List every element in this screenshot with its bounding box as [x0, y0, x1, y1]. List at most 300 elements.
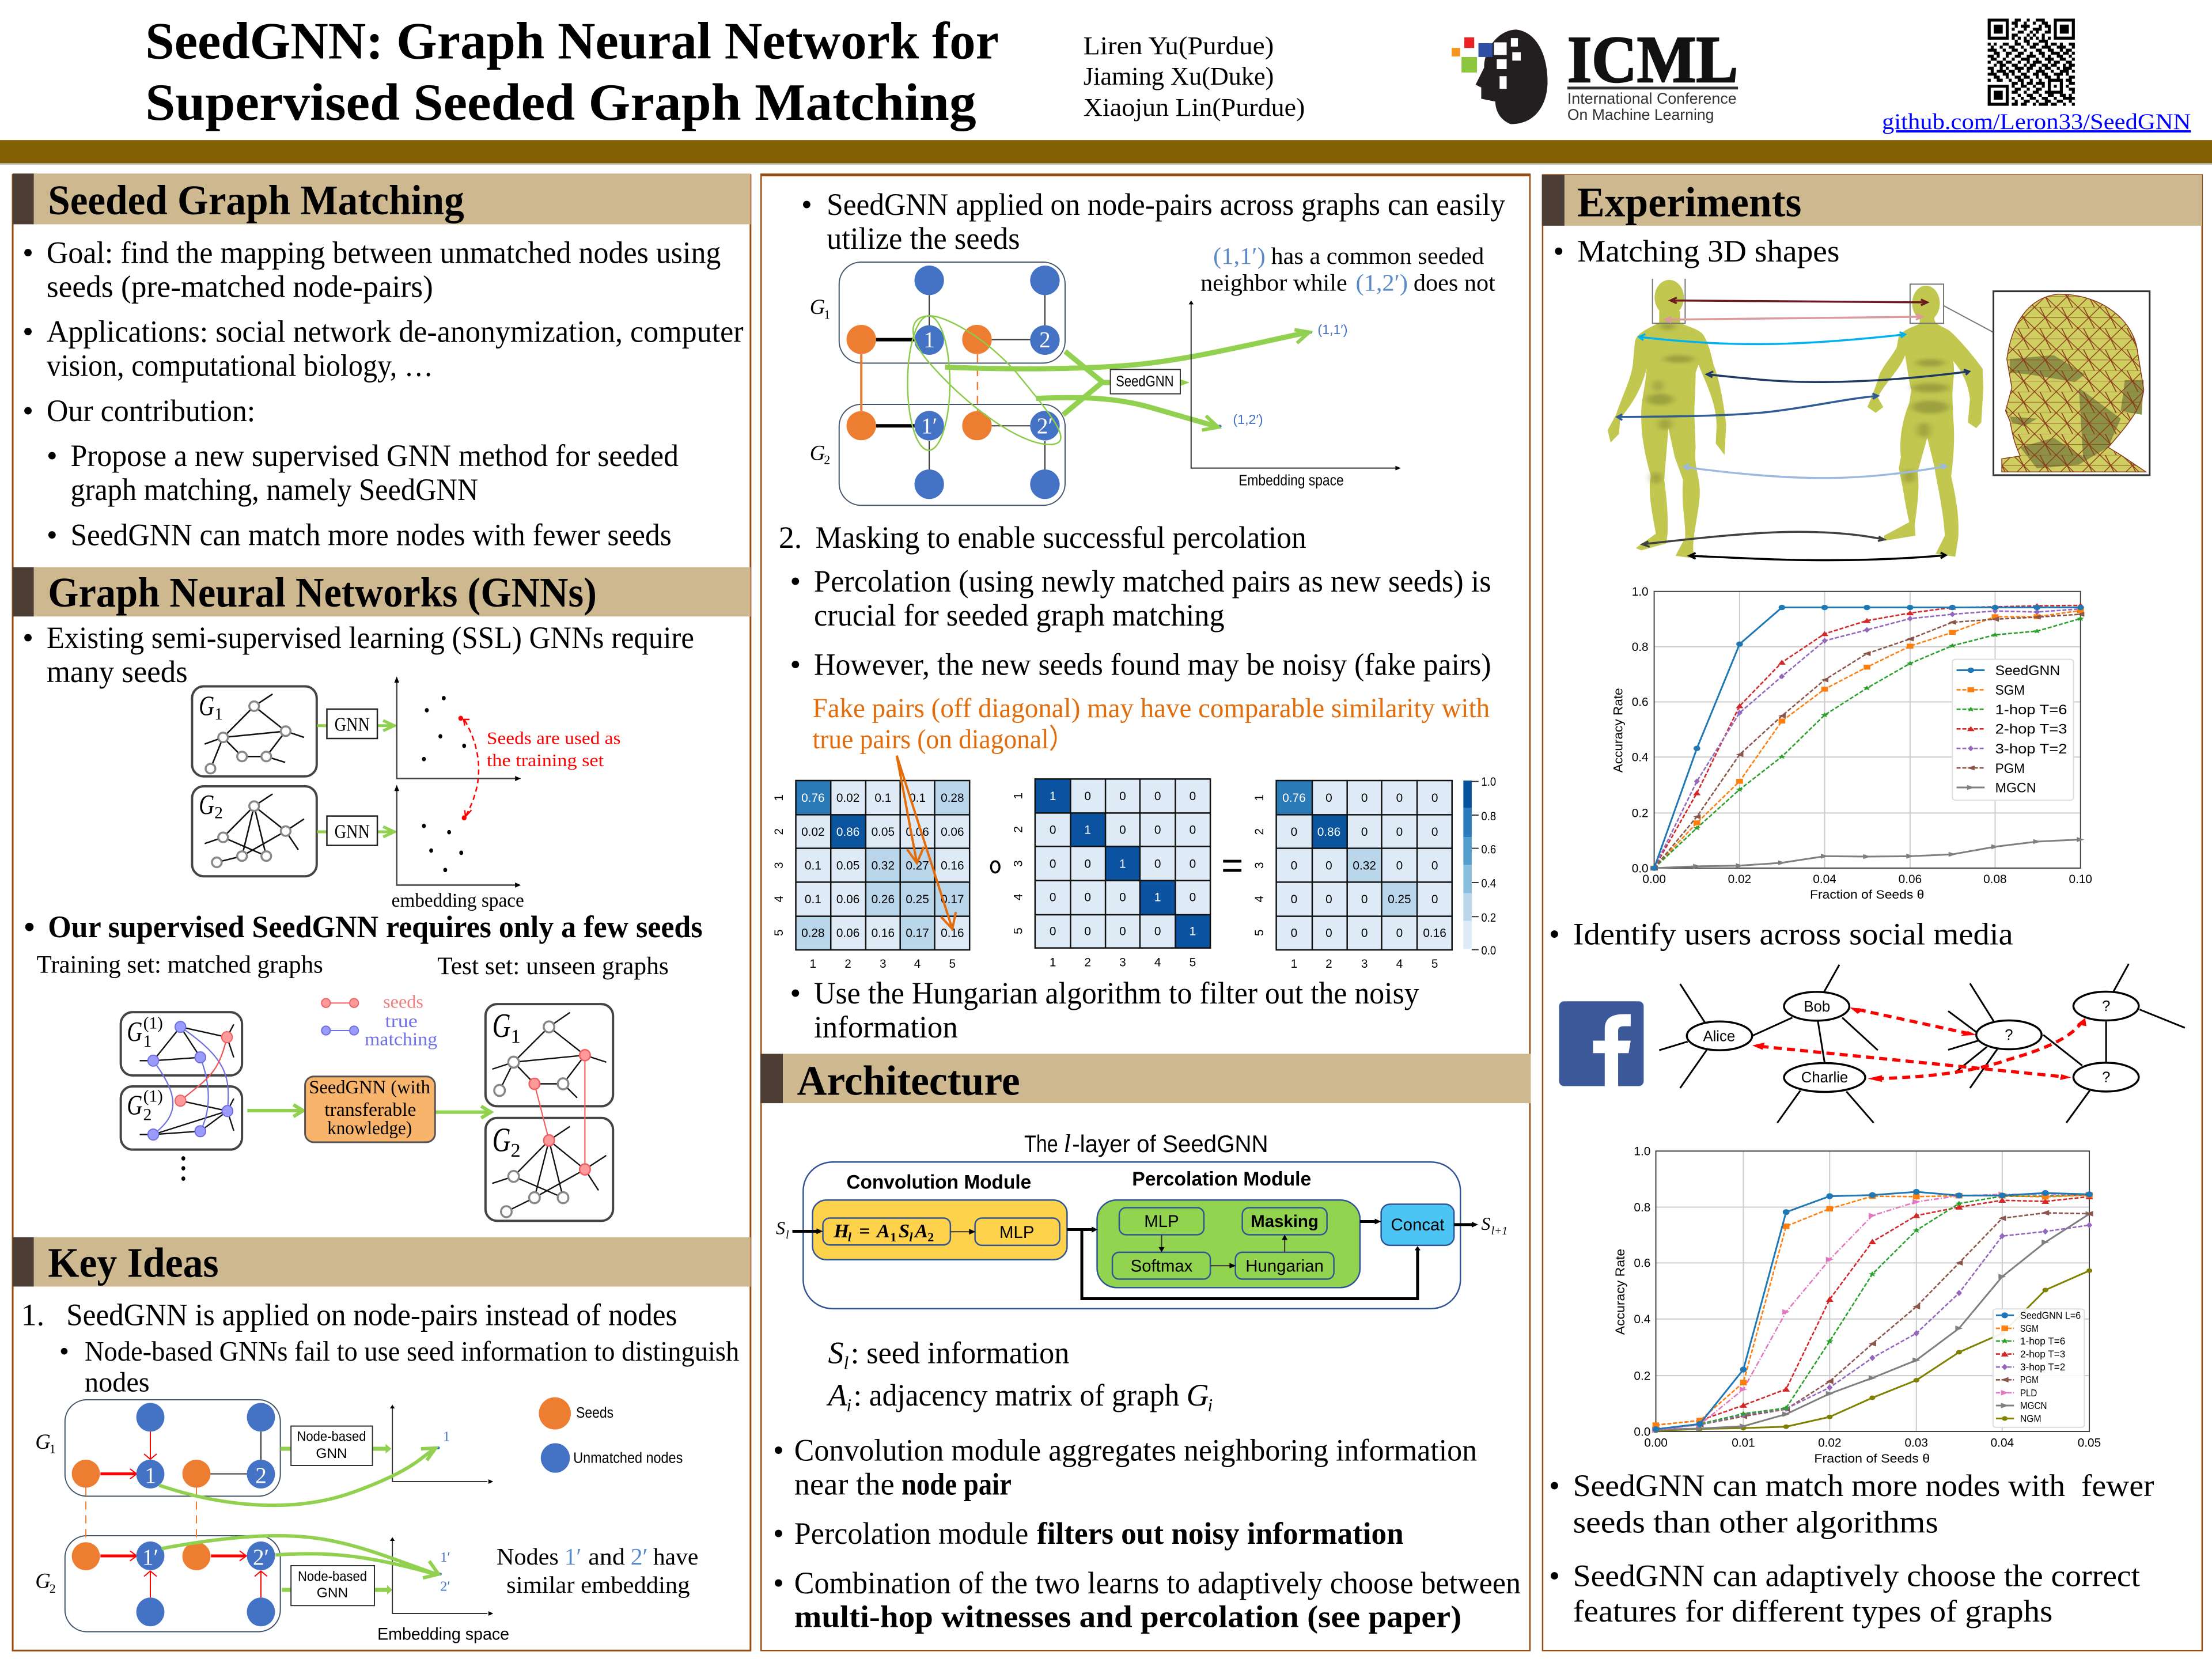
heatmaps: similarity, mask and result: 0 — [1154, 823, 1161, 836]
heatmaps: similarity, mask and result: 4 — [1154, 956, 1161, 969]
heatmaps: similarity, mask and result: 0 — [1431, 825, 1438, 839]
diagram: SeedGNN node-pair embedding: 1′ — [921, 414, 937, 438]
text block: goal and contribution: Our contribution: — [47, 393, 255, 428]
arrows: correspondences — [1618, 298, 1969, 560]
diagram: SeedGNN train and test: 2 — [511, 1139, 521, 1161]
heatmaps: similarity, mask and result: 0.16 — [1423, 927, 1446, 940]
heatmaps: similarity, mask and result: 0.28 — [941, 791, 964, 805]
heatmaps: similarity, mask and result: 0 — [1325, 893, 1332, 906]
text block: Hungarian: information — [814, 1010, 958, 1044]
heatmaps: similarity, mask and result: 0 — [1361, 927, 1368, 940]
chart: accuracy vs fraction of seeds (social media): PGM — [2020, 1374, 2039, 1385]
diagram: l-layer architecture: Percolation Module — [1132, 1168, 1311, 1190]
diagram: SeedGNN train and test: true — [385, 1011, 418, 1031]
text block: key idea 1 — [21, 1298, 739, 1398]
callout: fake pairs — [813, 693, 1490, 755]
diagram: semi-supervised GNN embedding: embedding space — [392, 889, 524, 911]
chart: accuracy vs fraction of seeds (social media): 0.8 — [1634, 1201, 1650, 1214]
text block: node-pairs: utilize the seeds — [827, 221, 1020, 256]
chart: accuracy vs fraction of seeds (3D shapes): 1-hop T=6 — [1995, 702, 2067, 718]
diagram: SeedGNN node-pair embedding: (1,1′) — [1213, 243, 1266, 270]
diagram: SeedGNN node-pair embedding: Embedding space — [1238, 472, 1344, 488]
heatmaps: similarity, mask and result: 4 — [772, 896, 786, 903]
heatmaps: similarity, mask and result: 0 — [1119, 823, 1126, 836]
diagram: l-layer architecture: l — [786, 1229, 789, 1241]
chart: accuracy vs fraction of seeds (3D shapes): 0.8 — [1632, 641, 1649, 654]
heatmaps: similarity, mask and result: 4 — [914, 957, 921, 971]
heatmaps: similarity, mask and result: 0 — [1396, 791, 1403, 805]
diagram: SeedGNN node-pair embedding — [810, 243, 1495, 505]
chart: accuracy vs fraction of seeds (social media): 0.05 — [2078, 1436, 2101, 1449]
heatmaps: similarity, mask and result: 3 — [880, 957, 887, 971]
chart: accuracy vs fraction of seeds (social media): 0.2 — [1634, 1370, 1650, 1383]
diagram: l-layer architecture: Concat — [1391, 1215, 1445, 1234]
text block: modules: • — [773, 1516, 784, 1551]
text block: key idea 1: 1. — [21, 1298, 44, 1332]
heatmaps: similarity, mask and result: 1 — [1291, 957, 1297, 971]
heatmaps: similarity, mask and result: 3 — [1012, 860, 1025, 867]
diagram: l-layer architecture: H — [833, 1220, 850, 1242]
chart: accuracy vs fraction of seeds (3D shapes): 0.04 — [1813, 873, 1836, 886]
chart: accuracy vs fraction of seeds (3D shapes): PGM — [1995, 761, 2025, 777]
text block: Hungarian — [790, 976, 1419, 1044]
diagram: node-based GNN embedding: 1′ — [142, 1545, 158, 1570]
diagram: node-based GNN embedding: similar embedding — [506, 1572, 690, 1599]
heading: Experiments — [1542, 175, 2202, 226]
diagram: SeedGNN node-pair embedding: does not — [1414, 270, 1495, 296]
heatmaps: similarity, mask and result: 0.06 — [906, 825, 929, 839]
text block: conclusions — [1549, 1468, 2154, 1628]
heading: Architecture: Architecture — [797, 1057, 1020, 1104]
diagram: social network de-anonymization: ? — [2102, 998, 2110, 1014]
heatmaps: similarity, mask and result: 0.0 — [1481, 944, 1496, 957]
chart: accuracy vs fraction of seeds (3D shapes): 0.6 — [1632, 696, 1649, 709]
text block: matching 3D shapes: Matching 3D shapes — [1577, 234, 1839, 268]
diagram: semi-supervised GNN embedding: G — [199, 789, 214, 820]
diagram: node-based GNN embedding: GNN — [316, 1446, 347, 1461]
text block: conclusions: seeds than other algorithms — [1573, 1505, 1938, 1540]
heatmaps: similarity, mask and result: 0.17 — [906, 927, 929, 940]
diagram: social network de-anonymization — [1559, 964, 2185, 1123]
diagram: SeedGNN train and test: (1) — [143, 1088, 163, 1106]
diagram: l-layer architecture: Softmax — [1131, 1256, 1193, 1275]
heatmaps: similarity, mask and result: 1 — [1084, 823, 1091, 836]
heatmaps: similarity, mask and result: 0 — [1325, 791, 1332, 805]
chart: accuracy vs fraction of seeds (3D shapes): 0.08 — [1983, 873, 2007, 886]
heatmaps: similarity, mask and result: 0.25 — [906, 893, 929, 906]
text block: modules: near the — [794, 1467, 895, 1501]
heatmaps: similarity, mask and result: 1 — [1190, 925, 1196, 938]
callout: fake pairs: true pairs (on diagonal） — [813, 724, 1075, 755]
text block: masking: However, the new seeds found may be noisy (fake pairs) — [814, 647, 1491, 682]
chart: accuracy vs fraction of seeds (social media): 0.02 — [1818, 1436, 1842, 1449]
diagram: l-layer architecture: A — [876, 1220, 890, 1242]
chart: accuracy vs fraction of seeds (social media): 2-hop T=3 — [2020, 1348, 2065, 1359]
diagram: social network de-anonymization: ? — [2005, 1027, 2013, 1043]
heatmaps: similarity, mask and result: 0 — [1190, 823, 1196, 836]
heatmaps: similarity, mask and result: 0 — [1084, 790, 1091, 803]
heatmaps: similarity, mask and result: 1 — [1012, 793, 1025, 800]
callout: fake pairs: Fake pairs (off diagonal) may have comparable similarity with — [813, 693, 1490, 724]
heatmaps: similarity, mask and result: 0 — [1050, 823, 1056, 836]
heading: Seeded Graph Matching: Seeded Graph Matching — [48, 177, 464, 224]
text block: masking — [779, 520, 1491, 682]
diagram: SeedGNN train and test: G — [127, 1089, 142, 1121]
heatmaps: similarity, mask and result: 0 — [1190, 858, 1196, 871]
diagram: node-based GNN embedding: 1 — [443, 1429, 450, 1445]
heatmaps: similarity, mask and result: 0.02 — [801, 825, 825, 839]
text block: SSL GNNs: Existing semi-supervised learning (SSL) GNNs require — [47, 620, 694, 655]
heatmaps: similarity, mask and result: 0 — [1119, 790, 1126, 803]
heatmaps: similarity, mask and result: 1 — [810, 957, 816, 971]
diagram: semi-supervised GNN embedding: G — [199, 690, 214, 722]
text block: supervised SeedGNN: Our supervised SeedGNN requires only a few seeds — [48, 910, 703, 944]
chart: accuracy vs fraction of seeds (social media): 3-hop T=2 — [2020, 1361, 2065, 1373]
header — [0, 12, 2212, 165]
heatmaps: similarity, mask and result: 2 — [1084, 956, 1091, 969]
heatmaps: similarity, mask and result: 0 — [1431, 893, 1438, 906]
diagram: node-based GNN embedding: Node-based — [297, 1429, 366, 1445]
diagram: social network de-anonymization: Charlie — [1801, 1070, 1848, 1086]
diagram: node-based GNN embedding: 1 — [50, 1441, 56, 1456]
chart: accuracy vs fraction of seeds (social media): 0.03 — [1904, 1436, 1928, 1449]
diagram: node-based GNN embedding: 1′ — [440, 1550, 450, 1565]
diagram: SeedGNN node-pair embedding: 2 — [824, 453, 830, 467]
diagram: l-layer architecture: A — [914, 1220, 928, 1242]
text block: supervised SeedGNN — [24, 910, 703, 980]
diagram: SeedGNN node-pair embedding: neighbor while — [1200, 270, 1347, 296]
chart: accuracy vs fraction of seeds (3D shapes): 0.4 — [1632, 751, 1649, 764]
heatmaps: similarity, mask and result: 0.32 — [872, 859, 895, 873]
diagram: social network de-anonymization: Alice — [1703, 1028, 1735, 1044]
heatmaps: similarity, mask and result: 0.1 — [874, 791, 891, 805]
heatmaps: similarity, mask and result: 0.86 — [836, 825, 859, 839]
link: github.com/Leron33/SeedGNN — [1882, 109, 2191, 134]
diagram: SeedGNN train and test: transferable — [324, 1100, 416, 1120]
text block: masking: Percolation (using newly matched pairs as new seeds) is — [814, 564, 1491, 599]
heatmaps: similarity, mask and result: 0.16 — [941, 927, 964, 940]
heatmaps: similarity, mask and result: 3 — [1253, 862, 1266, 869]
diagram: l-layer architecture: 2 — [927, 1230, 934, 1244]
diagram: l-layer architecture — [776, 1130, 1508, 1309]
heatmaps: similarity, mask and result: 0.1 — [805, 893, 821, 906]
heatmaps: similarity, mask and result: 0 — [1291, 927, 1297, 940]
chart: accuracy vs fraction of seeds (social media): 0.4 — [1634, 1313, 1650, 1326]
diagram: node-based GNN embedding: 1′ — [565, 1544, 582, 1570]
diagram: l-layer architecture: -layer of SeedGNN — [1072, 1130, 1268, 1157]
heatmaps: similarity, mask and result: 0 — [1431, 791, 1438, 805]
heading: Seeded Graph Matching — [13, 173, 751, 224]
diagram: l-layer architecture: Convolution Module — [846, 1171, 1031, 1193]
text block: modules: • — [773, 1566, 784, 1600]
text block: goal and contribution: Propose a new supervised GNN method for seeded — [70, 438, 679, 473]
chart: accuracy vs fraction of seeds (3D shapes): 1.0 — [1632, 585, 1649, 599]
text block: key idea 1: • — [59, 1335, 69, 1367]
heatmaps: similarity, mask and result: 0.6 — [1481, 843, 1496, 857]
chart: accuracy vs fraction of seeds (social media) — [1613, 1145, 2101, 1465]
heatmaps: similarity, mask and result: 0 — [1084, 925, 1091, 938]
diagram: SeedGNN train and test: G — [493, 1121, 511, 1158]
diagram: SeedGNN train and test: 2 — [143, 1105, 151, 1124]
authors: Jiaming Xu(Duke) — [1084, 62, 1274, 90]
diagram: SeedGNN train and test: matching — [365, 1029, 437, 1050]
chart: accuracy vs fraction of seeds (social media): 0.04 — [1991, 1436, 2014, 1449]
text block: key idea 1: Node-based GNNs fail to use seed information to distinguish — [85, 1335, 739, 1367]
diagram: semi-supervised GNN embedding: GNN — [335, 714, 370, 736]
text block: supervised SeedGNN: • — [24, 910, 35, 944]
diagram: SeedGNN node-pair embedding: has a common seeded — [1271, 243, 1484, 270]
heatmaps: similarity, mask and result: 0 — [1084, 891, 1091, 904]
text block: node-pairs — [801, 187, 1505, 256]
chart: accuracy vs fraction of seeds (social media): Fraction of Seeds θ — [1814, 1452, 1930, 1465]
diagram: l-layer architecture: l — [848, 1230, 852, 1244]
heatmaps: similarity, mask and result: 0 — [1050, 858, 1056, 871]
text block: modules: Convolution module aggregates neighboring information — [794, 1433, 1477, 1468]
text block: goal and contribution: Goal: find the mapping between unmatched nodes using — [47, 235, 721, 270]
heatmaps: similarity, mask and result: 0 — [1361, 791, 1368, 805]
heatmaps: similarity, mask and result: 0.06 — [941, 825, 964, 839]
diagram: SeedGNN node-pair embedding: G — [810, 295, 825, 319]
text block: SSL GNNs: many seeds — [47, 654, 188, 689]
heatmaps: similarity, mask and result: 0 — [1325, 859, 1332, 873]
text block: goal and contribution: • — [47, 517, 58, 552]
title: SeedGNN: Graph Neural Network for — [145, 12, 999, 70]
text block: goal and contribution: SeedGNN can match more nodes with fewer seeds — [70, 517, 672, 552]
diagram: l-layer architecture: Masking — [1251, 1212, 1319, 1231]
heatmaps: similarity, mask and result: 0 — [1190, 790, 1196, 803]
heatmaps: similarity, mask and result: 2 — [1325, 957, 1332, 971]
diagram: SeedGNN node-pair embedding: (1,2′) — [1355, 270, 1408, 296]
heatmaps: similarity, mask and result: 2 — [772, 828, 786, 835]
text block: masking: crucial for seeded graph matching — [814, 598, 1225, 632]
text block: notation: l — [843, 1353, 849, 1373]
heatmaps: similarity, mask and result: 0.76 — [1282, 791, 1306, 805]
heatmaps: similarity, mask and result: 0.06 — [836, 893, 859, 906]
heatmaps: similarity, mask and result: 0.06 — [836, 927, 859, 940]
text block: SSL GNNs: • — [22, 620, 33, 655]
heatmaps: similarity, mask and result: 0 — [1291, 893, 1297, 906]
chart: accuracy vs fraction of seeds (3D shapes): 2-hop T=3 — [1995, 722, 2067, 737]
chart: accuracy vs fraction of seeds (3D shapes): SGM — [1995, 683, 2025, 698]
heatmaps: similarity, mask and result: 5 — [1253, 929, 1266, 936]
heatmaps: similarity, mask and result: 0 — [1154, 925, 1161, 938]
heatmaps: similarity, mask and result: 0 — [1190, 891, 1196, 904]
heatmaps: similarity, mask and result: 0 — [1396, 927, 1403, 940]
header band — [0, 140, 2212, 165]
heading: Graph Neural Networks: Graph Neural Networks (GNNs) — [48, 569, 597, 616]
text block: key idea 1: SeedGNN is applied on node-pairs instead of nodes — [66, 1298, 677, 1332]
chart: accuracy vs fraction of seeds (social media): 1-hop T=6 — [2020, 1335, 2065, 1347]
heatmaps: similarity, mask and result: 0 — [1291, 859, 1297, 873]
heading: Architecture — [760, 1054, 1531, 1104]
diagram: l-layer architecture: l — [1064, 1130, 1071, 1158]
text block: modules: Percolation module — [794, 1516, 1028, 1551]
heading: Key Ideas: Key Ideas — [48, 1239, 219, 1286]
figure: 3D human shape correspondence — [1608, 279, 2150, 560]
text block: masking: • — [790, 647, 801, 682]
diagram: node-based GNN embedding: Seeds — [576, 1405, 613, 1421]
text block: goal and contribution: graph matching, namely SeedGNN — [70, 472, 478, 507]
text block: social media: • — [1549, 916, 1560, 951]
text block: goal and contribution: Applications: social network de-anonymization, computer — [47, 315, 744, 349]
diagram: semi-supervised GNN embedding: Seeds are used as — [487, 729, 621, 748]
diagram: l-layer architecture: MLP — [999, 1223, 1034, 1242]
heatmaps: similarity, mask and result: 0 — [1291, 825, 1297, 839]
heatmaps: similarity, mask and result: 0.1 — [909, 791, 926, 805]
diagram: node-based GNN embedding: G — [35, 1430, 51, 1453]
diagram: node-based GNN embedding: 2′ — [253, 1545, 269, 1570]
chart: accuracy vs fraction of seeds (social media): PLD — [2020, 1387, 2037, 1399]
text block: conclusions: features for different types of graphs — [1573, 1594, 2052, 1628]
text block: Hungarian: Use the Hungarian algorithm to filter out the noisy — [814, 976, 1419, 1010]
heatmaps: similarity, mask and result: 3 — [1119, 956, 1126, 969]
diagram: SeedGNN train and test — [121, 992, 613, 1221]
heatmaps: similarity, mask and result: 5 — [1431, 957, 1438, 971]
chart: accuracy vs fraction of seeds (3D shapes): Fraction of Seeds θ — [1810, 888, 1924, 902]
diagram: SeedGNN train and test: G — [127, 1016, 142, 1047]
diagram: node-based GNN embedding: 2′ — [631, 1544, 648, 1570]
heatmaps: similarity, mask and result: 0.16 — [872, 927, 895, 940]
heatmaps: similarity, mask and result: 0 — [1050, 891, 1056, 904]
chart: accuracy vs fraction of seeds (social media): 0.00 — [1644, 1436, 1668, 1449]
text block: SSL GNNs — [22, 620, 694, 689]
text block: notation: i — [846, 1395, 851, 1415]
heatmaps: similarity, mask and result: 1 — [1119, 858, 1126, 871]
icon: ICML logo: International Conference — [1567, 90, 1737, 107]
heatmaps: similarity, mask and result: 0 — [1396, 825, 1403, 839]
diagram: SeedGNN node-pair embedding: SeedGNN — [1116, 374, 1174, 390]
diagram: SeedGNN train and test: (1) — [143, 1014, 163, 1032]
icon: ICML logo: On Machine Learning — [1567, 106, 1714, 123]
heatmaps: similarity, mask and result: 1 — [1050, 790, 1056, 803]
diagram: node-based GNN embedding: Unmatched nodes — [573, 1450, 683, 1467]
heatmaps: similarity, mask and result: 0.4 — [1481, 877, 1496, 890]
heatmaps: similarity, mask and result: 0 — [1119, 891, 1126, 904]
chart: accuracy vs fraction of seeds (social media): MGCN — [2020, 1400, 2047, 1411]
heatmaps: similarity, mask and result: 0.1 — [805, 859, 821, 873]
chart: accuracy vs fraction of seeds (3D shapes) — [1611, 585, 2092, 902]
diagram: SeedGNN node-pair embedding: G — [810, 441, 825, 464]
heatmaps: similarity, mask and result — [772, 756, 1496, 971]
text block: conclusions: • — [1549, 1468, 1560, 1503]
diagram: node-based GNN embedding — [35, 1397, 698, 1644]
heatmaps: similarity, mask and result: 2 — [1253, 828, 1266, 835]
heatmaps: similarity, mask and result: 0.86 — [1317, 825, 1340, 839]
inset: head mesh — [1994, 291, 2150, 475]
chart: accuracy vs fraction of seeds (3D shapes): MGCN — [1995, 781, 2036, 796]
chart: accuracy vs fraction of seeds (social media): SGM — [2020, 1323, 2039, 1334]
diagram: node-based GNN embedding: have — [653, 1544, 698, 1570]
diagram: node-based GNN embedding: and — [588, 1544, 625, 1570]
chart: accuracy vs fraction of seeds (social media): 0.01 — [1732, 1436, 1755, 1449]
diagram: node-based GNN embedding: Nodes — [497, 1544, 559, 1570]
text block: goal and contribution: • — [47, 438, 58, 473]
text block: conclusions: SeedGNN can adaptively choose the correct — [1573, 1559, 2140, 1593]
chart: accuracy vs fraction of seeds (social media): 0.6 — [1634, 1257, 1650, 1270]
diagram: SeedGNN train and test: seeds — [383, 992, 423, 1012]
diagram: semi-supervised GNN embedding: GNN — [335, 821, 370, 843]
heatmaps: similarity, mask and result: 3 — [1361, 957, 1368, 971]
text block: goal and contribution: • — [22, 393, 33, 428]
heatmaps: similarity, mask and result: 0.28 — [801, 927, 825, 940]
heading: Experiments: Experiments — [1577, 179, 1801, 226]
heatmaps: similarity, mask and result: 0 — [1431, 859, 1438, 873]
diagram: node-based GNN embedding: 2 — [255, 1463, 267, 1488]
icon: QR code — [1988, 20, 2075, 104]
heatmaps: similarity, mask and result: 0.76 — [801, 791, 825, 805]
chart: accuracy vs fraction of seeds (social media): SeedGNN L=6 — [2020, 1309, 2081, 1321]
heatmaps: similarity, mask and result: 1 — [1154, 891, 1161, 904]
text block: supervised SeedGNN: Training set: matched graphs — [37, 951, 323, 978]
diagram: SeedGNN node-pair embedding: 2′ — [1037, 414, 1053, 438]
diagram: l-layer architecture: Hungarian — [1245, 1256, 1324, 1275]
diagram: node-based GNN embedding: G — [35, 1569, 51, 1593]
text block: supervised SeedGNN: Test set: unseen graphs — [437, 953, 669, 980]
heatmaps: similarity, mask and result: 0.32 — [1353, 859, 1376, 873]
text block: notation — [827, 1336, 1213, 1415]
text block: goal and contribution — [22, 235, 744, 552]
text block: conclusions: • — [1549, 1559, 1560, 1593]
chart: accuracy vs fraction of seeds (3D shapes): 0.06 — [1899, 873, 1922, 886]
heatmaps: similarity, mask and result: 0 — [1050, 925, 1056, 938]
text block: modules: multi-hop witnesses and percolation (see paper) — [794, 1600, 1461, 1634]
left human model — [1608, 280, 1726, 558]
right human model — [1868, 286, 1983, 557]
heatmaps: similarity, mask and result: 4 — [1012, 894, 1025, 900]
text block: notation: : seed information — [851, 1336, 1069, 1370]
heatmaps: similarity, mask and result: 0.02 — [836, 791, 859, 805]
diagram: l-layer architecture: The — [1024, 1130, 1058, 1157]
diagram: SeedGNN train and test: G — [493, 1007, 511, 1044]
text block: masking: Masking to enable successful percolation — [816, 520, 1306, 555]
heatmaps: similarity, mask and result: 0 — [1084, 858, 1091, 871]
title — [145, 12, 999, 131]
heatmaps: similarity, mask and result: 5 — [772, 929, 786, 936]
text block: modules — [773, 1433, 1521, 1634]
chart: accuracy vs fraction of seeds (social media): 0.0 — [1634, 1425, 1650, 1438]
heatmaps: similarity, mask and result: 1.0 — [1481, 775, 1496, 789]
text block: notation: A — [827, 1378, 848, 1412]
heatmaps: similarity, mask and result: 4 — [1396, 957, 1403, 971]
diagram: social network de-anonymization: Bob — [1804, 999, 1830, 1015]
text block: notation: S — [828, 1336, 844, 1370]
chart: accuracy vs fraction of seeds (3D shapes): 0.00 — [1642, 873, 1666, 886]
diagram: l-layer architecture: l+1 — [1491, 1225, 1508, 1237]
heatmaps: similarity, mask and result: 0.26 — [872, 893, 895, 906]
heatmaps: similarity, mask and result: 5 — [949, 957, 956, 971]
diagram: SeedGNN train and test: knowledge) — [327, 1118, 412, 1139]
text block: key idea 1: nodes — [85, 1366, 150, 1398]
chart: accuracy vs fraction of seeds (3D shapes): 3-hop T=2 — [1995, 741, 2067, 757]
chart: accuracy vs fraction of seeds (3D shapes): 0.0 — [1632, 862, 1649, 875]
chart: accuracy vs fraction of seeds (3D shapes): 0.02 — [1728, 873, 1751, 886]
chart: accuracy vs fraction of seeds (social media): 1.0 — [1634, 1145, 1650, 1158]
diagram: semi-supervised GNN embedding: the training set — [487, 751, 604, 770]
diagram: semi-supervised GNN embedding: 2 — [214, 804, 223, 822]
diagram: node-based GNN embedding: 2′ — [440, 1579, 450, 1594]
diagram: l-layer architecture: S — [1481, 1214, 1490, 1234]
diagram: SeedGNN node-pair embedding: 1 — [923, 327, 935, 352]
diagram: l-layer architecture: S — [899, 1220, 910, 1242]
panel: left column — [13, 173, 751, 1650]
diagram: node-based GNN embedding: GNN — [317, 1585, 348, 1601]
heatmaps: similarity, mask and result: 0 — [1154, 858, 1161, 871]
heatmaps: similarity, mask and result: 3 — [772, 862, 786, 869]
text block: Hungarian: • — [790, 976, 801, 1010]
text block: goal and contribution: • — [22, 315, 33, 349]
text block: node-pairs: SeedGNN applied on node-pairs across graphs can easily — [827, 187, 1505, 222]
heatmaps: similarity, mask and result: 0.8 — [1481, 810, 1496, 823]
